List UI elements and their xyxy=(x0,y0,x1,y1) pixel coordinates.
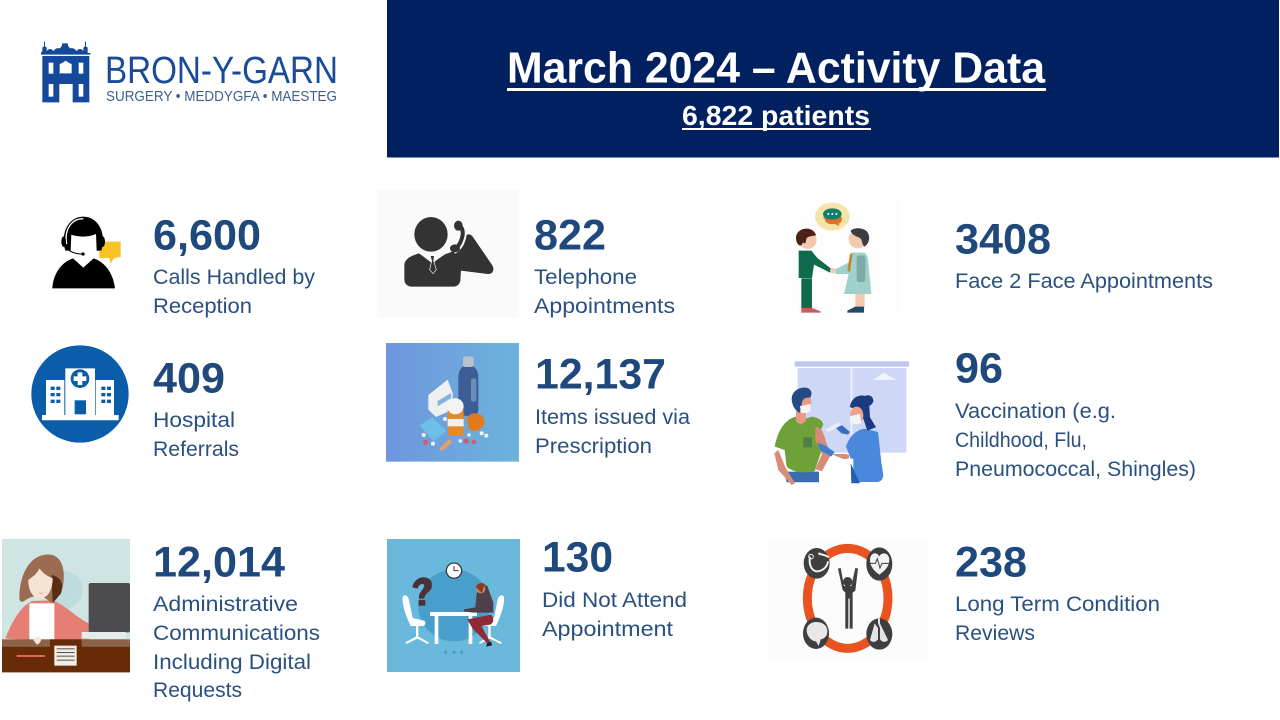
panel: telephone appointments xyxy=(377,190,675,318)
label: face 2 face appointments: Face 2 Face Appointments xyxy=(955,269,1213,293)
icon: receptionist at desk xyxy=(2,539,130,672)
stat: 6,600: 6,600 xyxy=(153,212,261,260)
stat: 822: 822 xyxy=(534,212,606,260)
label: long term condition reviews: Long Term Condition xyxy=(955,592,1160,616)
label: administrative communications including digital requests xyxy=(153,592,320,702)
label: long term condition reviews xyxy=(955,592,1160,645)
label: hospital referrals: Hospital xyxy=(153,408,235,432)
label: did not attend appointment: Did Not Attend xyxy=(542,588,687,612)
label: items issued via prescription: Items issued via xyxy=(535,405,690,429)
panel: administrative communications xyxy=(2,538,320,702)
stat: 130: 130 xyxy=(542,534,613,582)
label: calls handled by reception: Calls Handled by xyxy=(153,265,315,289)
stat: 12,137: 12,137 xyxy=(535,350,666,398)
icon: person surrounded by health symbols xyxy=(768,542,928,659)
icon: castle building xyxy=(41,42,90,102)
label: hospital referrals xyxy=(153,408,239,461)
icon: receptionist with headset xyxy=(52,217,121,288)
label: calls handled by reception: Reception xyxy=(153,294,252,318)
label: vaccination types: Childhood, Flu, xyxy=(955,428,1087,452)
panel: face 2 face appointments xyxy=(768,199,1213,314)
woman xyxy=(849,230,867,248)
label: hospital referrals: Referrals xyxy=(153,437,239,461)
label: did not attend appointment: Appointment xyxy=(542,617,673,641)
label: administrative communications including digital requests: Requests xyxy=(153,678,242,702)
label: did not attend appointment xyxy=(542,588,687,641)
icon: empty chair at meeting table xyxy=(387,539,520,672)
label: telephone appointments: Appointments xyxy=(534,294,675,318)
stat: 238: 238 xyxy=(955,538,1027,586)
label: items issued via prescription: Prescription xyxy=(535,434,652,458)
label: telephone appointments xyxy=(534,265,675,318)
label: administrative communications including digital requests: Including Digital xyxy=(153,650,311,674)
panel: vaccination xyxy=(774,344,1196,485)
label: telephone appointments: Telephone xyxy=(534,265,637,289)
label: vaccination types: Pneumococcal, Shingles) xyxy=(955,457,1196,481)
panel: prescription items xyxy=(386,343,690,462)
panel: did not attend xyxy=(387,534,687,672)
label: items issued via prescription xyxy=(535,405,690,458)
stat: 12,014: 12,014 xyxy=(153,538,285,586)
icon: nurse vaccinating patient xyxy=(774,361,909,485)
panel: hospital referrals xyxy=(31,345,239,461)
stat: 409: 409 xyxy=(153,354,225,402)
icon: two people shaking hands xyxy=(768,199,900,314)
logo: Bron-y-Garn Surgery xyxy=(41,42,338,105)
stat: 3408: 3408 xyxy=(955,216,1051,264)
title: March 2024 – Activity Data xyxy=(507,44,1046,92)
logo strapline: SURGERY • MEDDYGFA • MAESTEG xyxy=(106,89,337,105)
label: administrative communications including digital requests: Communications xyxy=(153,621,320,645)
label: vaccination types: Vaccination (e.g. xyxy=(955,399,1116,423)
icon: hospital xyxy=(31,345,129,443)
label: vaccination types xyxy=(955,399,1196,481)
icon: man on telephone xyxy=(377,190,519,317)
stat: 96: 96 xyxy=(955,344,1003,392)
logo wordmark: BRON-Y-GARN xyxy=(105,50,338,92)
panel: long term condition reviews xyxy=(768,538,1160,659)
icon: medicines xyxy=(386,343,519,462)
header banner xyxy=(387,0,1279,158)
subtitle: patient count: 6,822 patients xyxy=(682,100,870,131)
man xyxy=(799,231,817,249)
label: calls handled by reception xyxy=(153,265,315,318)
panel: calls handled xyxy=(52,212,315,318)
label: long term condition reviews: Reviews xyxy=(955,621,1035,645)
label: administrative communications including digital requests: Administrative xyxy=(153,592,298,616)
